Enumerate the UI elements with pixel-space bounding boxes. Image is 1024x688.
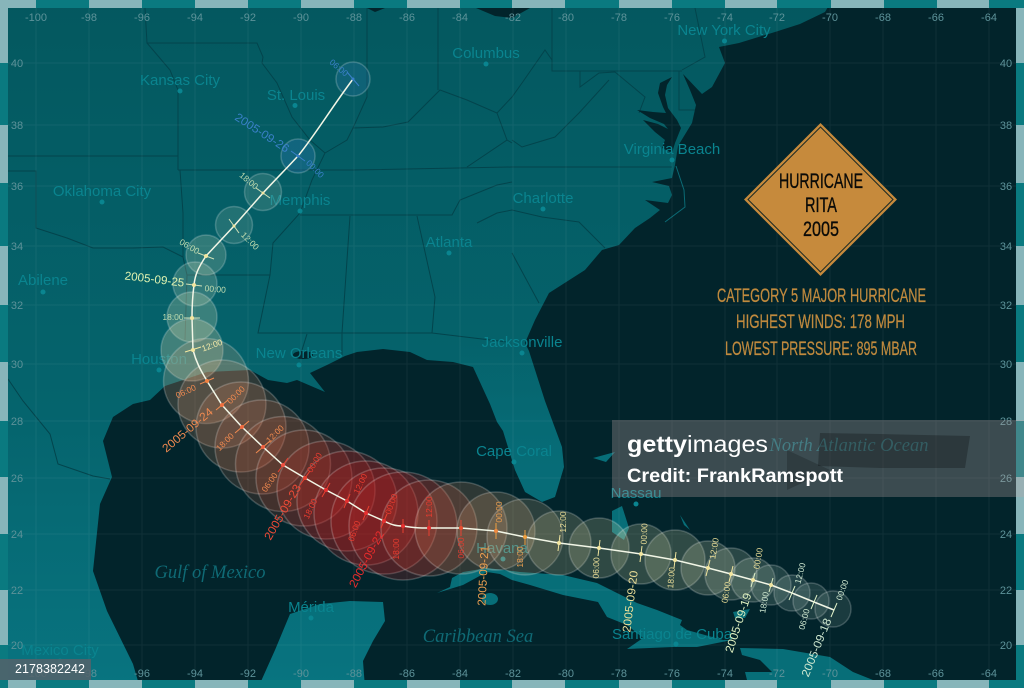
left latitude labels — [11, 58, 23, 652]
right latitude labels: 26 — [1000, 473, 1012, 485]
left latitude labels: 32 — [11, 300, 23, 312]
date labels: 2005-09-23 — [263, 483, 304, 542]
right latitude labels: 34 — [1000, 241, 1012, 253]
wind-field circles — [161, 62, 851, 627]
time labels: 00:00 — [834, 578, 851, 602]
city labels: Mexico City — [21, 642, 99, 659]
time labels: 18:00 — [301, 497, 319, 520]
top longitude labels: -72 — [769, 12, 785, 24]
time labels: 18:00 — [515, 546, 525, 568]
city labels: Mérida — [288, 599, 335, 616]
top longitude labels: -96 — [134, 12, 150, 24]
time labels: 06:00 — [259, 470, 280, 494]
time labels: 00:00 — [204, 283, 227, 295]
bottom longitude labels: -72 — [769, 668, 785, 680]
time labels: 00:00 — [305, 451, 324, 474]
top longitude labels: -94 — [187, 12, 203, 24]
top longitude labels: -68 — [875, 12, 891, 24]
bottom longitude labels: -68 — [875, 668, 891, 680]
top longitude labels — [25, 12, 997, 24]
left latitude labels: 34 — [11, 241, 23, 253]
sea labels: Gulf of Mexico — [155, 563, 265, 583]
date labels: 2005-09-26 — [232, 112, 291, 155]
top longitude labels: -64 — [981, 12, 997, 24]
bottom longitude labels: -76 — [664, 668, 680, 680]
hurricane statistics text: LOWEST PRESSURE: 895 MBAR — [725, 339, 917, 360]
image id tag: 2178382242 — [15, 662, 85, 676]
track ticks — [184, 72, 837, 617]
left latitude labels: 26 — [11, 473, 23, 485]
right latitude labels — [1000, 58, 1012, 652]
city labels: Atlanta — [426, 234, 473, 251]
city labels: St. Louis — [267, 87, 325, 104]
city labels: Virginia Beach — [624, 141, 720, 158]
hurricane statistics text: HIGHEST WINDS: 178 MPH — [736, 312, 905, 333]
time labels: 00:00 — [304, 158, 326, 180]
watermark band: Credit: FrankRamspott — [627, 466, 844, 487]
bottom longitude labels: -80 — [558, 668, 574, 680]
city labels: New Orleans — [256, 345, 342, 362]
time labels: 18:00 — [214, 431, 236, 453]
top longitude labels: -78 — [611, 12, 627, 24]
bottom longitude labels: -82 — [505, 668, 521, 680]
left latitude labels: 20 — [11, 640, 23, 652]
top longitude labels: -66 — [928, 12, 944, 24]
image id tag — [0, 659, 91, 680]
date labels: 2005-09-18 — [800, 617, 834, 679]
date labels: 2005-09-20 — [621, 570, 641, 633]
time labels: 06:00 — [178, 237, 201, 256]
time labels: 00:00 — [638, 523, 650, 545]
top longitude labels: -100 — [25, 12, 47, 24]
left latitude labels: 36 — [11, 181, 23, 193]
city labels: Charlotte — [513, 190, 573, 207]
right latitude labels: 36 — [1000, 181, 1012, 193]
date labels: 2005-09-19 — [724, 592, 754, 654]
time labels: 12:00 — [793, 561, 808, 585]
city labels: Cape Coral — [476, 443, 552, 460]
time labels: 06:00 — [719, 581, 733, 604]
hurricane statistics text: CATEGORY 5 MAJOR HURRICANE — [717, 286, 926, 307]
bottom longitude labels: -70 — [822, 668, 838, 680]
time labels: 12:00 — [424, 496, 434, 518]
left latitude labels: 40 — [11, 58, 23, 70]
time labels: 18:00 — [238, 170, 260, 192]
top longitude labels: -76 — [664, 12, 680, 24]
top longitude labels: -74 — [717, 12, 733, 24]
time labels — [162, 57, 851, 631]
top longitude labels: -82 — [505, 12, 521, 24]
top longitude labels: -88 — [346, 12, 362, 24]
time labels: 00:00 — [225, 384, 247, 406]
bottom longitude labels: -92 — [240, 668, 256, 680]
city labels: Memphis — [270, 192, 330, 209]
time labels: 06:00 — [174, 382, 198, 400]
chesapeake bay — [637, 77, 681, 153]
right latitude labels: 32 — [1000, 300, 1012, 312]
time labels: 06:00 — [456, 537, 466, 559]
road sign: hurricane rita 2005: HURRICANE — [779, 170, 863, 193]
hurricane statistics text — [717, 286, 926, 360]
right latitude labels: 24 — [1000, 529, 1012, 541]
time labels: 18:00 — [391, 538, 401, 560]
outer banks barrier — [665, 166, 685, 222]
bahamas and islands — [482, 452, 750, 618]
watermark band — [612, 420, 1024, 497]
city labels: New York City — [677, 22, 771, 39]
time labels: 12:00 — [239, 230, 261, 252]
date labels — [124, 112, 834, 679]
time labels: 00:00 — [751, 547, 765, 570]
time labels: 12:00 — [707, 537, 721, 560]
city labels: Nassau — [611, 485, 661, 502]
cuba — [437, 568, 732, 649]
right latitude labels: 30 — [1000, 359, 1012, 371]
sea labels — [155, 436, 928, 647]
city labels: Houston — [131, 351, 187, 368]
bottom longitude labels: -78 — [611, 668, 627, 680]
city labels — [18, 22, 771, 659]
city labels: Kansas City — [140, 72, 221, 89]
time labels: 06:00 — [346, 519, 363, 543]
bottom longitude labels: -64 — [981, 668, 997, 680]
time labels: 00:00 — [494, 501, 504, 523]
time labels: 06:00 — [328, 57, 350, 79]
time labels: 18:00 — [665, 566, 677, 589]
road sign: hurricane rita 2005 — [744, 123, 897, 276]
date labels: 2005-09-22 — [347, 529, 387, 590]
right latitude labels: 28 — [1000, 416, 1012, 428]
florida peninsula tint — [460, 340, 570, 510]
great lakes — [293, 8, 530, 359]
bottom longitude labels: -94 — [187, 668, 203, 680]
left latitude labels: 24 — [11, 529, 23, 541]
city labels: Oklahoma City — [53, 183, 152, 200]
time labels: 00:00 — [383, 492, 400, 516]
hispaniola — [740, 648, 873, 680]
watermark band: gettyimages — [627, 431, 768, 457]
city labels: Santiago de Cuba — [612, 626, 733, 643]
bottom longitude labels: -74 — [717, 668, 733, 680]
left latitude labels: 30 — [11, 359, 23, 371]
time labels: 18:00 — [162, 312, 184, 322]
date labels: 2005-09-24 — [160, 406, 216, 455]
city labels: Havana — [476, 540, 529, 557]
bottom longitude labels: -86 — [399, 668, 415, 680]
sea labels: Caribbean Sea — [423, 627, 533, 647]
bottom longitude labels: -66 — [928, 668, 944, 680]
time labels: 18:00 — [757, 591, 771, 614]
sea labels: North Atlantic Ocean — [769, 436, 928, 456]
right latitude labels: 22 — [1000, 585, 1012, 597]
left latitude labels: 28 — [11, 416, 23, 428]
bottom longitude labels: -100 — [25, 668, 47, 680]
road sign: hurricane rita 2005: RITA — [805, 194, 837, 217]
top longitude labels: -98 — [81, 12, 97, 24]
date labels: 2005-09-25 — [124, 270, 185, 290]
bottom longitude labels: -96 — [134, 668, 150, 680]
city dots — [40, 38, 727, 664]
top longitude labels: -70 — [822, 12, 838, 24]
bottom longitude labels: -90 — [293, 668, 309, 680]
bottom longitude labels: -98 — [81, 668, 97, 680]
time labels: 12:00 — [200, 337, 224, 354]
time labels: 06:00 — [591, 557, 601, 579]
left latitude labels: 22 — [11, 585, 23, 597]
time labels: 12:00 — [558, 511, 568, 533]
time labels: 12:00 — [264, 423, 286, 445]
city labels: Jacksonville — [482, 334, 562, 351]
left latitude labels: 38 — [11, 120, 23, 132]
track point dots — [190, 78, 773, 587]
top longitude labels: -84 — [452, 12, 468, 24]
road sign: hurricane rita 2005: 2005 — [803, 218, 839, 241]
state borders — [8, 8, 705, 479]
storm track line — [192, 79, 834, 610]
bottom longitude labels: -84 — [452, 668, 468, 680]
top longitude labels: -86 — [399, 12, 415, 24]
time labels: 06:00 — [797, 607, 812, 631]
bottom longitude labels — [25, 668, 997, 680]
right latitude labels: 40 — [1000, 58, 1012, 70]
date labels: 2005-09-21 — [476, 546, 492, 606]
city labels: Columbus — [452, 45, 520, 62]
bottom longitude labels: -88 — [346, 668, 362, 680]
top longitude labels: -90 — [293, 12, 309, 24]
top longitude labels: -80 — [558, 12, 574, 24]
right latitude labels: 20 — [1000, 640, 1012, 652]
right latitude labels: 38 — [1000, 120, 1012, 132]
time labels: 12:00 — [351, 472, 369, 495]
city labels: Abilene — [18, 272, 68, 289]
top longitude labels: -92 — [240, 12, 256, 24]
